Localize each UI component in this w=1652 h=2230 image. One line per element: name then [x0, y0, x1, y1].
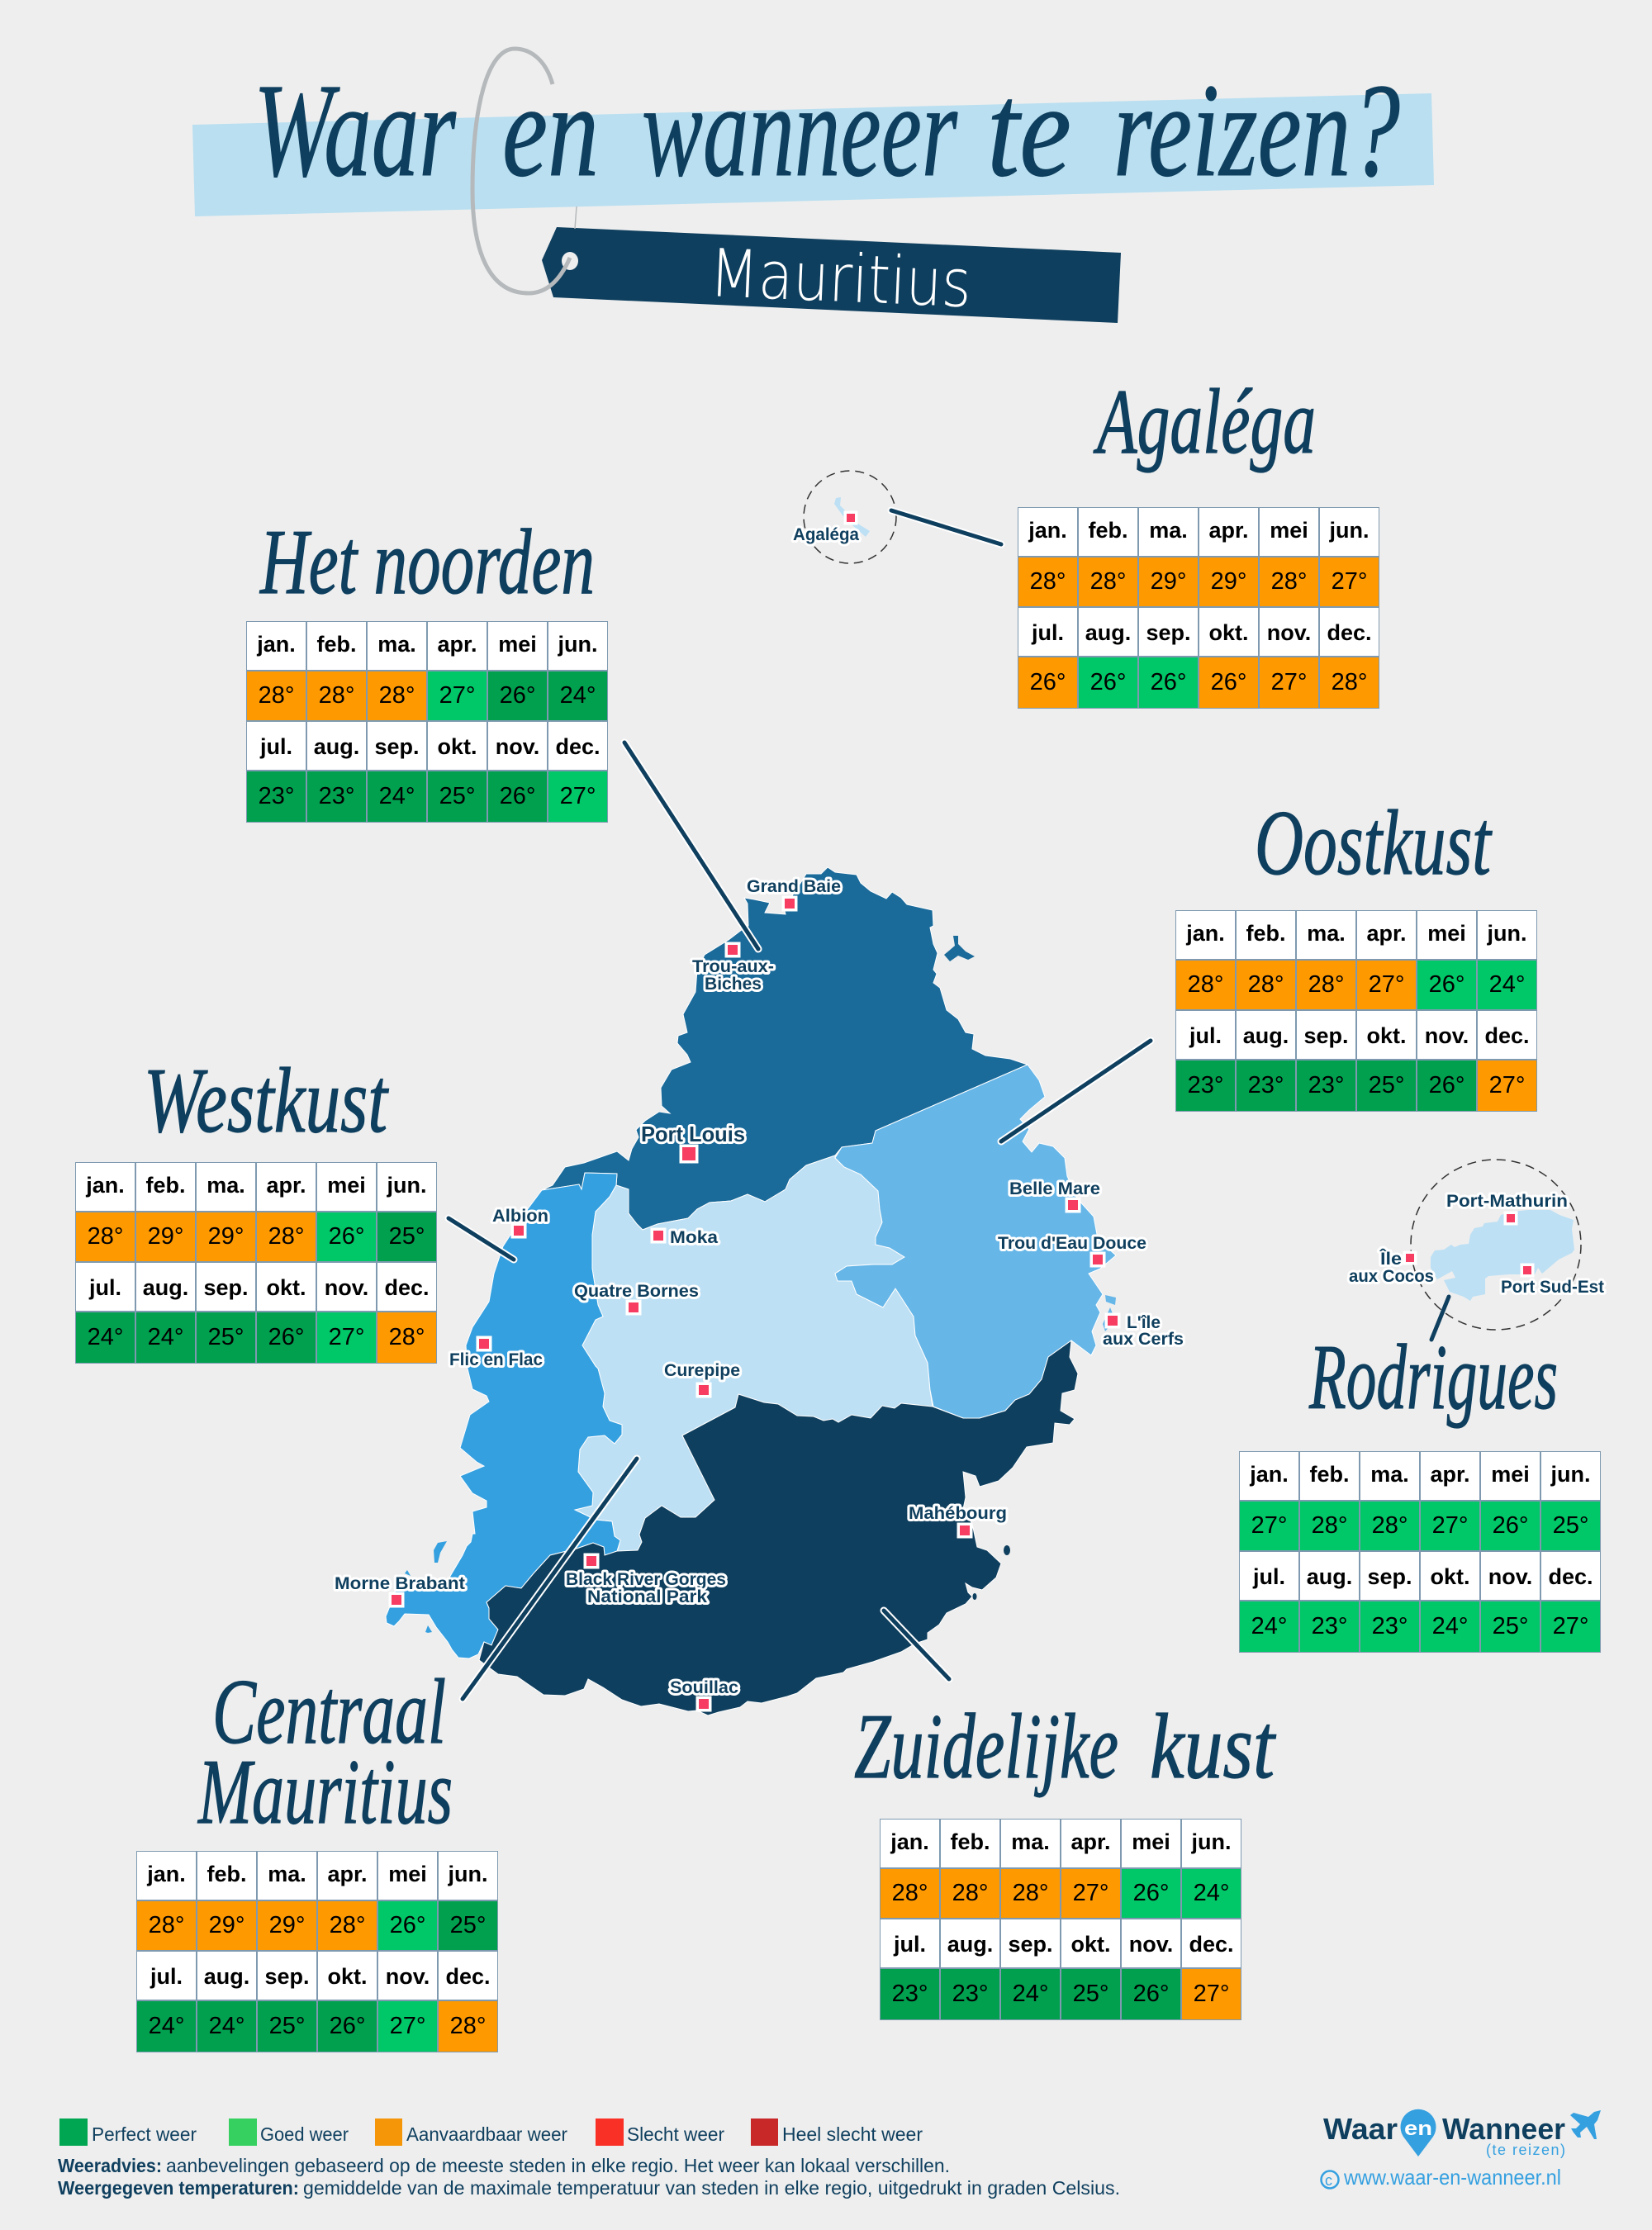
table: Westkust: dec.	[384, 1275, 430, 1300]
inset: Agaléga: Agaléga	[793, 524, 860, 544]
table: Westkust: aug.	[143, 1275, 188, 1300]
city: Belle Mare	[1009, 1179, 1100, 1210]
table: Agaléga: 28°	[1332, 669, 1367, 695]
table: Zuidelijke kust: sep.	[1008, 1932, 1053, 1957]
table: Zuidelijke kust: apr.	[1070, 1829, 1111, 1853]
table: Het noorden: 28°	[379, 682, 415, 709]
table: Centraal Mauritius: 25°	[450, 1912, 486, 1938]
city: Morne Brabant	[335, 1573, 465, 1605]
table: Agaléga: mei	[1270, 517, 1308, 542]
table: Agaléga: jul.	[1032, 620, 1064, 645]
legend	[59, 2118, 923, 2146]
city: Black River Gorges National Park: Black River Gorges	[566, 1569, 726, 1589]
table: Centraal Mauritius: 28°	[450, 2013, 486, 2039]
inset: Rodrigues: Port-Mathurin	[1446, 1191, 1568, 1211]
table: Rodrigues: 23°	[1372, 1613, 1408, 1639]
table: Oostkust: dec.	[1484, 1023, 1530, 1048]
table: Westkust: 28°	[389, 1324, 425, 1350]
table: Het noorden: okt.	[437, 734, 477, 759]
table: Het noorden: feb.	[316, 631, 357, 656]
table: Centraal Mauritius: 29°	[269, 1912, 305, 1938]
city: L'île aux Cerfs: aux Cerfs	[1103, 1329, 1184, 1349]
table: Centraal Mauritius: jun.	[448, 1862, 487, 1886]
table: Rodrigues	[1239, 1451, 1601, 1653]
city: Belle Mare: Belle Mare	[1009, 1179, 1100, 1198]
table: Westkust: jun.	[387, 1173, 426, 1198]
table: Oostkust: mei	[1427, 920, 1466, 945]
inset: Rodrigues: aux Cocos	[1349, 1266, 1434, 1286]
table: Het noorden: 26°	[500, 682, 535, 709]
table: Oostkust	[1175, 910, 1537, 1112]
region: oostkust	[835, 1065, 1116, 1418]
table: Agaléga: 26°	[1090, 669, 1126, 695]
table: Rodrigues: jun.	[1551, 1462, 1591, 1487]
table: Het noorden: apr.	[437, 631, 477, 656]
table: Westkust: sep.	[203, 1275, 249, 1300]
table: Het noorden: 28°	[259, 682, 294, 709]
heading: Centraal Mauritius: Mauritius	[197, 1741, 453, 1843]
city: Trou d'Eau Douce: Trou d'Eau Douce	[998, 1233, 1146, 1253]
city: Mahébourg	[909, 1503, 1007, 1535]
table: Centraal Mauritius: okt.	[327, 1964, 367, 1989]
table: Rodrigues: sep.	[1367, 1564, 1412, 1589]
table: Agaléga: 29°	[1211, 568, 1246, 595]
region: het noorden	[542, 867, 1028, 1230]
note: weergegeven temperaturen: gemiddelde van de maximale temperatuur van steden in elke regio, uitgedrukt in graden Celsius.	[303, 2177, 1120, 2199]
table: Oostkust: nov.	[1425, 1023, 1469, 1048]
legend: Heel slecht weer	[782, 2123, 923, 2145]
legend: Slecht weer	[627, 2123, 724, 2145]
city: Trou-aux-Biches: Trou-aux-	[692, 956, 774, 976]
table: Centraal Mauritius: dec.	[445, 1964, 491, 1989]
heading: Agaléga: Agaléga	[1093, 371, 1316, 473]
table: Agaléga: 29°	[1151, 568, 1186, 595]
table: Centraal Mauritius: mei	[388, 1862, 427, 1886]
table: Agaléga: 26°	[1211, 669, 1246, 695]
city: Black River Gorges National Park	[566, 1556, 726, 1606]
city: Trou-aux-Biches: Biches	[705, 974, 762, 994]
table: Rodrigues: 25°	[1493, 1613, 1528, 1639]
table: Zuidelijke kust: 24°	[1013, 1981, 1048, 2007]
table: Agaléga: 28°	[1090, 568, 1126, 595]
title: en	[502, 57, 599, 205]
city: Albion: Albion	[492, 1206, 548, 1226]
title: te	[987, 57, 1071, 205]
table: Centraal Mauritius	[136, 1851, 498, 2052]
title	[254, 57, 1400, 205]
table: Agaléga: 27°	[1332, 568, 1367, 595]
note: weeradvies: aanbevelingen gebaseerd op de meeste steden in elke regio. Het weer kan lokaal verschillen.	[166, 2155, 950, 2176]
table: Zuidelijke kust: feb.	[950, 1829, 990, 1853]
table: Rodrigues: mei	[1491, 1462, 1530, 1487]
table: Rodrigues: dec.	[1548, 1564, 1593, 1589]
table: Westkust: 24°	[88, 1324, 123, 1350]
table: Rodrigues: apr.	[1430, 1462, 1470, 1487]
table: Zuidelijke kust: 26°	[1133, 1880, 1169, 1906]
logo	[1323, 2109, 1601, 2158]
table: Zuidelijke kust	[880, 1819, 1241, 2020]
table: Westkust: 25°	[389, 1223, 425, 1250]
title: Waar	[254, 57, 457, 205]
heading: Westkust: Westkust	[144, 1050, 389, 1152]
city: Trou-aux-Biches	[692, 945, 774, 994]
table: Rodrigues: 28°	[1312, 1512, 1347, 1539]
table: Westkust: apr.	[266, 1173, 306, 1198]
leader: het noorden	[624, 743, 758, 949]
table: Oostkust: 23°	[1188, 1072, 1223, 1098]
table: Agaléga: okt.	[1208, 620, 1249, 645]
table: Centraal Mauritius: jul.	[150, 1964, 183, 1989]
city: Quatre Bornes: Quatre Bornes	[574, 1281, 699, 1301]
table: Het noorden: 23°	[319, 783, 354, 809]
city: Morne Brabant: Morne Brabant	[335, 1573, 465, 1593]
table: Agaléga: jun.	[1330, 517, 1370, 542]
table: Centraal Mauritius: nov.	[386, 1964, 430, 1989]
city: L'île aux Cerfs	[1103, 1312, 1184, 1349]
table: Het noorden: dec.	[555, 734, 601, 759]
table: Zuidelijke kust: jul.	[894, 1932, 926, 1957]
table: Zuidelijke kust: 28°	[892, 1880, 928, 1906]
table: Zuidelijke kust: 23°	[892, 1981, 928, 2007]
table: Oostkust: 27°	[1489, 1072, 1525, 1098]
table: Westkust: 28°	[88, 1223, 123, 1250]
table: Agaléga: ma.	[1149, 517, 1188, 542]
table: Centraal Mauritius: ma.	[268, 1862, 306, 1886]
inset: Rodrigues	[1349, 1160, 1604, 1340]
city: Port Louis: Port Louis	[641, 1122, 745, 1146]
logo: (te reizen)	[1486, 2142, 1565, 2158]
table: Oostkust: 28°	[1308, 971, 1344, 998]
city: L'île aux Cerfs: L'île	[1127, 1312, 1161, 1332]
table: Westkust: jul.	[89, 1275, 121, 1300]
table: Oostkust: jun.	[1487, 920, 1526, 945]
table: Oostkust: sep.	[1303, 1023, 1349, 1048]
table: Centraal Mauritius: apr.	[327, 1862, 368, 1886]
luggage tag	[472, 49, 1121, 323]
table: Zuidelijke kust: dec.	[1189, 1932, 1234, 1957]
table: Centraal Mauritius: jan.	[147, 1862, 186, 1886]
table: Zuidelijke kust: jan.	[890, 1829, 929, 1853]
table: Westkust: 26°	[268, 1324, 304, 1350]
table: Westkust: 25°	[208, 1324, 244, 1350]
city: Moka	[653, 1227, 719, 1247]
logo: en	[1404, 2118, 1432, 2140]
table: Het noorden	[246, 621, 608, 823]
city: Trou d'Eau Douce	[998, 1233, 1146, 1264]
title: reizen?	[1113, 57, 1400, 205]
inset: Agaléga	[793, 471, 1001, 563]
table: Rodrigues: jan.	[1250, 1462, 1289, 1487]
table: Agaléga: 28°	[1030, 568, 1066, 595]
table: Rodrigues: aug.	[1307, 1564, 1352, 1589]
legend: Goed weer	[260, 2123, 349, 2145]
heading: Oostkust: Oostkust	[1255, 792, 1493, 894]
inset: Rodrigues: Île	[1379, 1248, 1402, 1269]
table: Zuidelijke kust: 27°	[1194, 1981, 1229, 2007]
inset: Rodrigues: Port Sud-Est	[1501, 1277, 1604, 1297]
table: Het noorden: 28°	[319, 682, 354, 709]
table: Rodrigues: 26°	[1493, 1512, 1528, 1539]
table: Het noorden: 25°	[439, 783, 475, 809]
table: Zuidelijke kust: nov.	[1129, 1932, 1173, 1957]
table: Zuidelijke kust: 27°	[1073, 1880, 1108, 1906]
table: Zuidelijke kust: ma.	[1011, 1829, 1050, 1853]
table: Rodrigues: 27°	[1251, 1512, 1287, 1539]
table: Zuidelijke kust: 23°	[952, 1981, 988, 2007]
table: Rodrigues: 24°	[1251, 1613, 1287, 1639]
note: weergegeven temperaturen: Weergegeven temperaturen:	[58, 2177, 299, 2199]
table: Centraal Mauritius: 27°	[390, 2013, 425, 2039]
table: Het noorden: 26°	[500, 783, 535, 809]
table: Rodrigues: feb.	[1309, 1462, 1350, 1487]
table: Oostkust: jan.	[1186, 920, 1225, 945]
table: Het noorden: jan.	[257, 631, 296, 656]
city: Quatre Bornes	[574, 1281, 699, 1312]
table: Westkust: 26°	[329, 1223, 364, 1250]
table: Het noorden: mei	[498, 631, 537, 656]
table: Zuidelijke kust: okt.	[1070, 1932, 1110, 1957]
legend: Perfect weer	[92, 2123, 197, 2145]
table: Oostkust: 26°	[1429, 1072, 1464, 1098]
leader: westkust	[449, 1218, 514, 1260]
table: Het noorden: ma.	[377, 631, 416, 656]
title banner	[192, 93, 1434, 216]
table: Oostkust: 28°	[1188, 971, 1223, 998]
title: wanneer	[642, 57, 958, 205]
website: www.waar-en-wanneer.nl	[1343, 2165, 1561, 2190]
table: Centraal Mauritius: sep.	[264, 1964, 310, 1989]
city: Flic en Flac	[449, 1339, 543, 1369]
table: Zuidelijke kust: mei	[1132, 1829, 1170, 1853]
city: Port Louis	[641, 1122, 745, 1160]
table: Het noorden: jul.	[260, 734, 292, 759]
table: Westkust: nov.	[325, 1275, 368, 1300]
table: Agaléga: dec.	[1327, 620, 1372, 645]
table: Centraal Mauritius: 28°	[149, 1912, 184, 1938]
leader: oostkust	[1001, 1041, 1151, 1141]
table: Zuidelijke kust: 28°	[952, 1880, 988, 1906]
table: Het noorden: 27°	[560, 783, 596, 809]
heading: Centraal Mauritius	[197, 1661, 453, 1843]
table: Rodrigues: 28°	[1372, 1512, 1408, 1539]
table: Zuidelijke kust: 28°	[1013, 1880, 1048, 1906]
table: Het noorden: aug.	[314, 734, 359, 759]
region: centraal mauritius	[575, 1155, 933, 1553]
heading: Het noorden: Het noorden	[259, 511, 595, 614]
table: Oostkust: 27°	[1369, 971, 1404, 998]
table: Het noorden: 24°	[379, 783, 415, 809]
table: Westkust: jan.	[86, 1173, 125, 1198]
city: Grand Baie	[747, 876, 841, 909]
legend: Aanvaardbaar weer	[406, 2123, 567, 2145]
city: Moka: Moka	[670, 1227, 719, 1247]
table: Zuidelijke kust: jun.	[1191, 1829, 1231, 1853]
table: Oostkust: okt.	[1366, 1023, 1406, 1048]
city: Souillac: Souillac	[670, 1677, 738, 1697]
table: Westkust: 28°	[268, 1223, 304, 1250]
table: Rodrigues: ma.	[1370, 1462, 1409, 1487]
table: Het noorden: 23°	[259, 783, 294, 809]
city: Albion	[492, 1206, 548, 1236]
table: Westkust: 24°	[148, 1324, 183, 1350]
table: Oostkust: jul.	[1189, 1023, 1222, 1048]
table: Westkust: mei	[327, 1173, 366, 1198]
heading: Zuidelijke kust: Zuidelijke	[854, 1696, 1118, 1798]
city: Black River Gorges National Park: National Park	[587, 1587, 707, 1606]
table: Oostkust: 25°	[1369, 1072, 1404, 1098]
region: zuidelijke kust	[479, 1340, 1078, 1715]
table: Rodrigues: okt.	[1430, 1564, 1470, 1589]
table: Rodrigues: 24°	[1432, 1613, 1468, 1639]
table: Rodrigues: 27°	[1553, 1613, 1588, 1639]
table: Agaléga: 26°	[1151, 669, 1186, 695]
table: Westkust: feb.	[145, 1173, 185, 1198]
table: Centraal Mauritius: 24°	[149, 2013, 184, 2039]
table: Het noorden: 24°	[560, 682, 596, 709]
table: Het noorden: jun.	[558, 631, 598, 656]
table: Centraal Mauritius: 25°	[269, 2013, 305, 2039]
table: Zuidelijke kust: aug.	[947, 1932, 993, 1957]
leader: centraal mauritius	[463, 1459, 637, 1699]
table: Het noorden: 27°	[439, 682, 475, 709]
table: Zuidelijke kust: 24°	[1194, 1880, 1229, 1906]
table: Oostkust: 24°	[1489, 971, 1525, 998]
table: Oostkust: 23°	[1308, 1072, 1344, 1098]
table: Zuidelijke kust: 26°	[1133, 1981, 1169, 2007]
table: Rodrigues: nov.	[1488, 1564, 1532, 1589]
table: Centraal Mauritius: 24°	[209, 2013, 244, 2039]
table: Oostkust: aug.	[1243, 1023, 1289, 1048]
table: Rodrigues: 27°	[1432, 1512, 1468, 1539]
table: Centraal Mauritius: 28°	[330, 1912, 365, 1938]
table: Rodrigues: 23°	[1312, 1613, 1347, 1639]
table: Westkust: ma.	[206, 1173, 245, 1198]
luggage tag: Mauritius	[708, 235, 973, 322]
table: Westkust: okt.	[266, 1275, 306, 1300]
table: Het noorden: sep.	[374, 734, 420, 759]
note: weeradvies: Weeradvies:	[58, 2155, 162, 2176]
logo: Waar	[1323, 2112, 1398, 2146]
table: Agaléga	[1018, 507, 1379, 709]
table: Agaléga: aug.	[1085, 620, 1131, 645]
city: Mahébourg: Mahébourg	[909, 1503, 1007, 1523]
table: Westkust: 29°	[208, 1223, 244, 1250]
table: Oostkust: ma.	[1307, 920, 1346, 945]
table: Westkust	[75, 1162, 437, 1364]
table: Agaléga: 28°	[1271, 568, 1307, 595]
table: Rodrigues: 25°	[1553, 1512, 1588, 1539]
table: Agaléga: 26°	[1030, 669, 1066, 695]
table: Agaléga: 27°	[1271, 669, 1307, 695]
table: Oostkust: 26°	[1429, 971, 1464, 998]
leader: zuidelijke kust	[884, 1611, 949, 1679]
table: Centraal Mauritius: aug.	[204, 1964, 249, 1989]
table: Centraal Mauritius: feb.	[206, 1862, 246, 1886]
city: Curepipe	[664, 1360, 740, 1395]
table: Centraal Mauritius: 26°	[330, 2013, 365, 2039]
table: Het noorden: nov.	[496, 734, 539, 759]
heading: Centraal Mauritius: Centraal	[212, 1661, 446, 1763]
table: Agaléga: nov.	[1267, 620, 1311, 645]
table: Oostkust: feb.	[1246, 920, 1285, 945]
city: Curepipe: Curepipe	[664, 1360, 740, 1380]
table: Westkust: 27°	[329, 1324, 364, 1350]
table: Agaléga: sep.	[1146, 620, 1191, 645]
table: Rodrigues: jul.	[1253, 1564, 1285, 1589]
website: c	[1325, 2172, 1332, 2189]
table: Zuidelijke kust: 25°	[1073, 1981, 1108, 2007]
logo: Wanneer	[1442, 2112, 1565, 2146]
table: Oostkust: 23°	[1248, 1072, 1284, 1098]
city: Souillac	[670, 1677, 738, 1709]
table: Agaléga: feb.	[1088, 517, 1128, 542]
table: Centraal Mauritius: 26°	[390, 1912, 425, 1938]
heading: Zuidelijke kust: kust	[1150, 1696, 1276, 1798]
city: Flic en Flac: Flic en Flac	[449, 1350, 543, 1369]
table: Oostkust: apr.	[1366, 920, 1407, 945]
table: Agaléga: jan.	[1028, 517, 1067, 542]
table: Centraal Mauritius: 29°	[209, 1912, 244, 1938]
table: Oostkust: 28°	[1248, 971, 1284, 998]
city: Grand Baie: Grand Baie	[747, 876, 841, 896]
region: westkust	[386, 1173, 622, 1658]
table: Westkust: 29°	[148, 1223, 183, 1250]
table: Agaléga: apr.	[1208, 517, 1249, 542]
